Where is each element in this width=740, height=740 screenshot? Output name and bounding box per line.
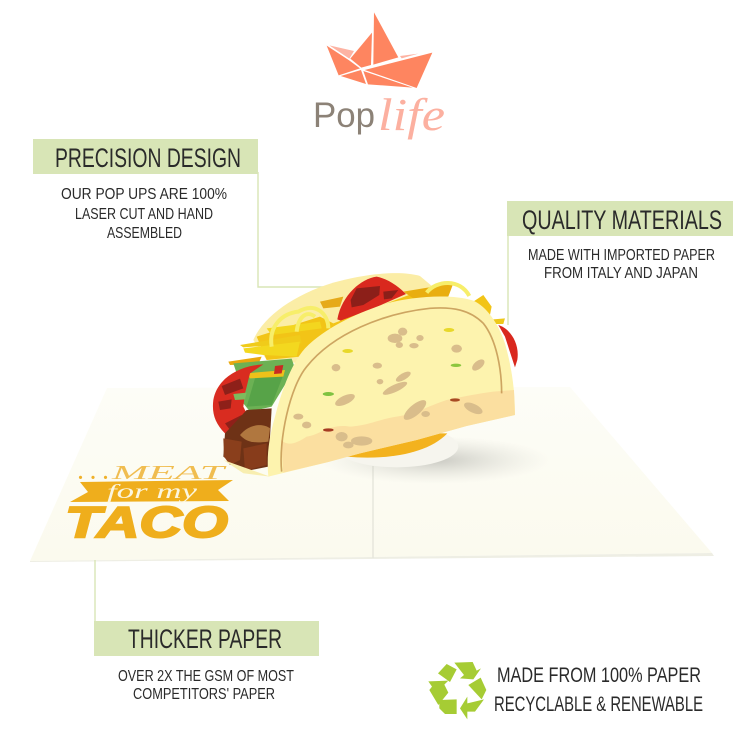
card lettering: Meat for my Taco bbox=[65, 462, 233, 547]
wordmark: Pop bbox=[313, 96, 375, 135]
card lettering: Meat for my Taco: TACO bbox=[65, 498, 228, 547]
wordmark bbox=[313, 89, 445, 140]
tomato top bbox=[337, 277, 406, 322]
lettuce bbox=[233, 359, 295, 412]
recycling statement bbox=[494, 664, 703, 716]
wordmark: life bbox=[378, 89, 445, 140]
plate bbox=[335, 426, 458, 467]
meat bbox=[223, 408, 272, 472]
bottom shell sliver bbox=[223, 460, 270, 477]
callout: quality materials: FROM ITALY AND JAPAN bbox=[544, 265, 698, 282]
callout leader lines bbox=[95, 172, 508, 622]
callout: thicker paper: THICKER PAPER bbox=[128, 624, 282, 654]
callout: precision design: OUR POP UPS ARE 100% bbox=[61, 186, 227, 203]
back shell bbox=[253, 273, 437, 367]
callout: precision design: PRECISION DESIGN bbox=[55, 143, 241, 173]
illustration: taco pop-up bbox=[213, 273, 518, 477]
toppings bbox=[323, 328, 461, 432]
back right tomato bbox=[498, 325, 518, 367]
callout: thicker paper: OVER 2X THE GSM OF MOST bbox=[118, 668, 294, 685]
toasted lower edge bbox=[281, 390, 515, 473]
card lettering: Meat for my Taco: ... bbox=[78, 462, 108, 484]
callout: thicker paper bbox=[94, 621, 319, 703]
callout: quality materials bbox=[507, 201, 733, 282]
browned edge stroke bbox=[281, 308, 502, 472]
tomato side bbox=[213, 364, 263, 433]
callout: precision design: LASER CUT AND HAND bbox=[75, 206, 213, 223]
callout: precision design bbox=[33, 139, 258, 242]
card lettering: Meat for my Taco: MEAT bbox=[110, 462, 228, 484]
toast spots bbox=[293, 328, 486, 448]
callout: thicker paper: COMPETITORS' PAPER bbox=[133, 686, 275, 703]
logo: Poplife bbox=[313, 12, 445, 140]
icon: recycling symbol bbox=[428, 662, 486, 719]
cast shadow bbox=[320, 436, 550, 484]
icon: paper boat bbox=[327, 12, 432, 88]
pop-up card base bbox=[30, 387, 714, 562]
shredded cheese bbox=[228, 283, 505, 365]
ribbon bbox=[70, 480, 233, 502]
front shell bbox=[268, 297, 515, 477]
callout: precision design: ASSEMBLED bbox=[107, 225, 182, 242]
onion rings bbox=[271, 283, 469, 347]
card lettering: Meat for my Taco: for my bbox=[107, 481, 197, 503]
